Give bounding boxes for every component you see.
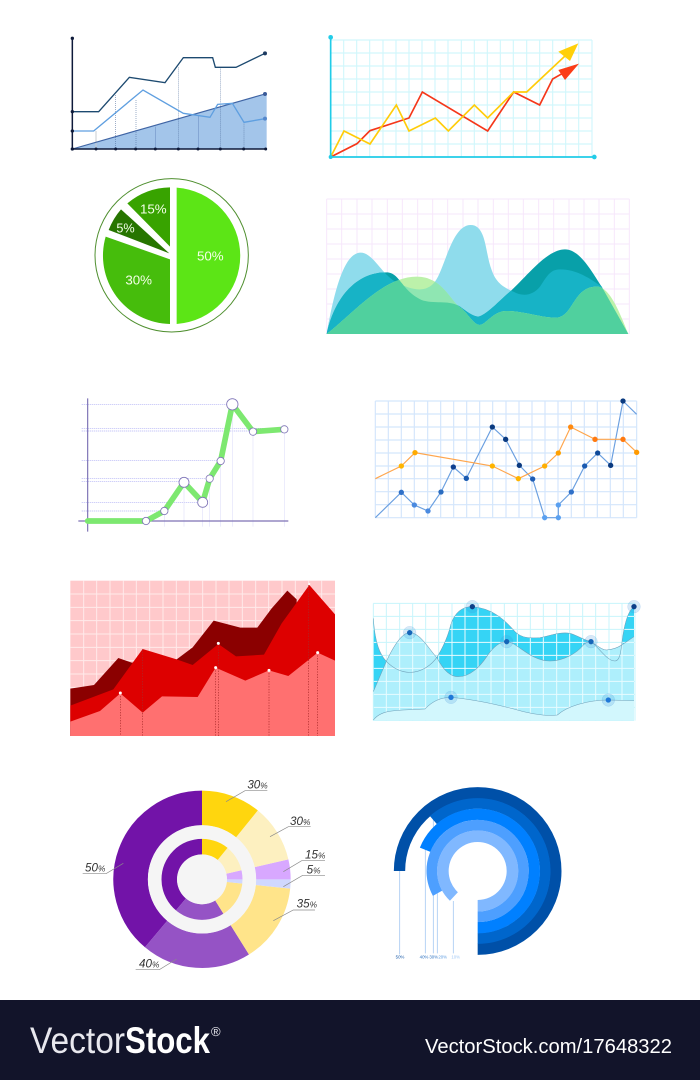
blue radial bar chart: [396, 793, 556, 960]
pale green layer: [327, 277, 628, 334]
grid: [331, 40, 592, 157]
axes: [331, 37, 594, 157]
bright red layer: [70, 585, 335, 736]
blue dots: [399, 398, 626, 520]
pink background: [70, 581, 335, 736]
red area chart: [70, 581, 335, 736]
donut labels: 5%: [307, 863, 321, 876]
dark teal layer: [327, 249, 628, 334]
layered area chart: [327, 199, 629, 334]
white data points: [119, 583, 319, 694]
outer ring: [95, 179, 248, 332]
radial bar labels: 20%: [438, 955, 447, 960]
light blue line series: [72, 90, 265, 131]
radial bar labels: [396, 955, 460, 960]
curve outlines: [373, 607, 634, 720]
orange series line: [375, 427, 637, 479]
donut labels: 50%: [85, 862, 106, 875]
center circle: [177, 854, 227, 904]
radial bar labels: 40%: [420, 955, 428, 960]
radial bar labels: 30%: [429, 955, 438, 960]
footer logo bold part: Stock: [125, 1020, 210, 1061]
pie labels: [116, 201, 224, 287]
white grid on fills: [373, 603, 635, 721]
white grid: [70, 581, 335, 703]
pie labels: 50%: [197, 249, 224, 264]
cyan curve chart: [373, 600, 640, 721]
footer logo: Vector: [30, 1020, 125, 1061]
pale grid: [373, 603, 635, 721]
yellow arrow line: [331, 43, 578, 157]
leader lines: [83, 791, 325, 970]
dark red layer: [70, 591, 297, 736]
axes: [72, 38, 266, 149]
dark navy line series: [72, 53, 265, 112]
green series line: [88, 404, 284, 521]
donut labels: 15%: [305, 849, 326, 862]
drop lines: [96, 67, 244, 149]
line and area chart: navy and blue: [71, 37, 267, 151]
radial bar labels: 10%: [451, 955, 460, 960]
vertical guide lines: [164, 404, 284, 527]
axis and series dots: [71, 37, 267, 151]
radial bars: [399, 793, 556, 949]
area series top line: [72, 94, 265, 149]
donut labels: [85, 778, 326, 970]
pie labels: 30%: [125, 272, 152, 287]
teal overlap: [326, 270, 602, 334]
grid: [327, 199, 629, 334]
slice 15%: [127, 187, 170, 247]
data point circles: [142, 399, 288, 525]
horizontal guide lines: [82, 404, 283, 511]
line chart with arrows: [328, 35, 597, 159]
axis end dots: [328, 35, 597, 159]
blue series line: [375, 401, 637, 518]
marker dots: [407, 604, 637, 703]
grid: [375, 401, 637, 518]
pie labels: 15%: [140, 201, 167, 216]
light cyan layer: [373, 633, 634, 721]
green pie chart: [95, 179, 248, 332]
green line chart with circles: [78, 398, 288, 532]
leader lines: [400, 817, 453, 954]
orange dots: [399, 424, 639, 481]
gray separator ring: [155, 832, 249, 927]
dotted drop lines: [120, 585, 318, 736]
axes: [78, 398, 288, 532]
outer ring segments: [131, 808, 273, 951]
slice 50%: [177, 188, 240, 324]
salmon layer: [70, 653, 335, 736]
orange and blue dotted line chart: [375, 398, 639, 520]
slice 5%: [109, 209, 169, 253]
dark cyan layer: [373, 607, 634, 721]
registered mark: ®: [211, 1024, 221, 1039]
donut labels: 40%: [139, 957, 160, 970]
green over teal: [327, 277, 628, 334]
marker halos: [403, 600, 640, 706]
pie labels: 5%: [116, 221, 135, 235]
radial bar labels: 50%: [396, 955, 404, 960]
donut labels: 30%: [247, 778, 268, 791]
donut labels: 35%: [297, 898, 318, 911]
footer band: [0, 1000, 700, 1080]
red arrow line: [331, 64, 579, 157]
footer image id: VectorStock.com/17648322: [425, 1036, 672, 1058]
purple and yellow donut chart: [83, 778, 326, 970]
green over light blue: [328, 282, 628, 333]
shaded area series: [72, 94, 267, 149]
light blue layer: [327, 225, 628, 334]
donut labels: 30%: [290, 815, 311, 828]
slice 30%: [103, 237, 170, 324]
palest bottom layer: [373, 697, 634, 721]
inner ring segments: [169, 846, 235, 912]
